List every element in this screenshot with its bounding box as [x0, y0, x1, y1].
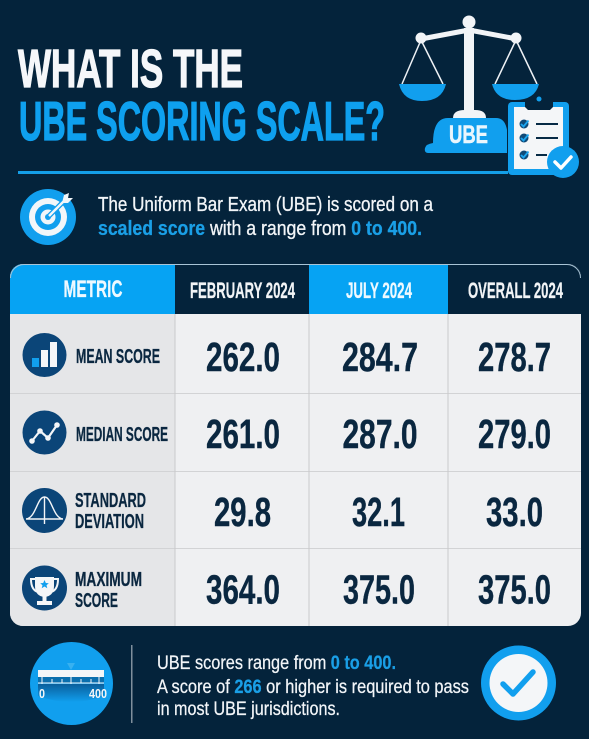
panel: score table	[10, 264, 581, 626]
row: mean score	[22, 333, 551, 380]
divider	[131, 645, 132, 723]
header: July 2024	[309, 264, 448, 314]
icon: scales of justice with clipboard	[399, 16, 579, 178]
row: median score: 261.0	[206, 411, 280, 457]
row: maximum score: 375.0	[343, 566, 415, 612]
row: standard deviation: DEVIATION	[75, 510, 144, 533]
header: metric: METRIC	[64, 276, 122, 303]
row: median score: MEDIAN SCORE	[76, 423, 168, 446]
icon: score ruler 0 to 400: 0	[39, 686, 45, 701]
icon: line chart	[22, 410, 66, 454]
header: metric	[10, 264, 175, 314]
title	[18, 39, 385, 152]
row: maximum score	[22, 566, 551, 612]
icon: bell curve	[22, 488, 67, 533]
row: mean score: 262.0	[206, 334, 280, 380]
row: standard deviation: 33.0	[486, 489, 543, 535]
title underline	[18, 171, 508, 174]
intro text: scaled score with a range from 0 to 400.	[98, 218, 422, 240]
title: WHAT IS THE	[18, 39, 243, 99]
intro text: The Uniform Bar Exam (UBE) is scored on a	[98, 194, 434, 216]
row: maximum score: 375.0	[478, 566, 551, 612]
row: median score: 279.0	[478, 411, 551, 457]
header: February 2024	[175, 264, 309, 314]
row: mean score: MEAN SCORE	[76, 345, 160, 368]
row: standard deviation: STANDARD	[75, 489, 146, 512]
label: UBE: UBE	[449, 121, 488, 149]
footer text	[157, 653, 469, 720]
icon: target with arrow	[20, 189, 76, 245]
footer text: UBE scores range from 0 to 400.	[157, 653, 396, 674]
footer text: A score of 266 or higher is required to pass	[157, 677, 469, 698]
row: mean score: 284.7	[342, 334, 418, 380]
footer text: in most UBE jurisdictions.	[157, 699, 340, 720]
intro text	[98, 194, 434, 240]
row: standard deviation	[22, 488, 543, 535]
row: standard deviation: 29.8	[214, 489, 271, 535]
row: standard deviation: 32.1	[352, 489, 405, 535]
row: maximum score: 364.0	[206, 566, 280, 612]
row: median score	[22, 410, 551, 457]
icon: score ruler 0 to 400	[30, 642, 113, 725]
row: median score: 287.0	[342, 411, 418, 457]
header: Overall 2024	[448, 264, 581, 314]
icon: score ruler 0 to 400: 400	[89, 686, 107, 701]
row: maximum score: MAXIMUM	[75, 568, 142, 591]
icon: trophy	[22, 566, 67, 610]
row: mean score: 278.7	[478, 334, 551, 380]
icon: bar chart	[22, 333, 66, 377]
icon: check badge	[481, 646, 556, 720]
header: July 2024: JULY 2024	[346, 278, 412, 303]
row: maximum score: SCORE	[75, 589, 118, 612]
header: February 2024: FEBRUARY 2024	[190, 278, 295, 303]
